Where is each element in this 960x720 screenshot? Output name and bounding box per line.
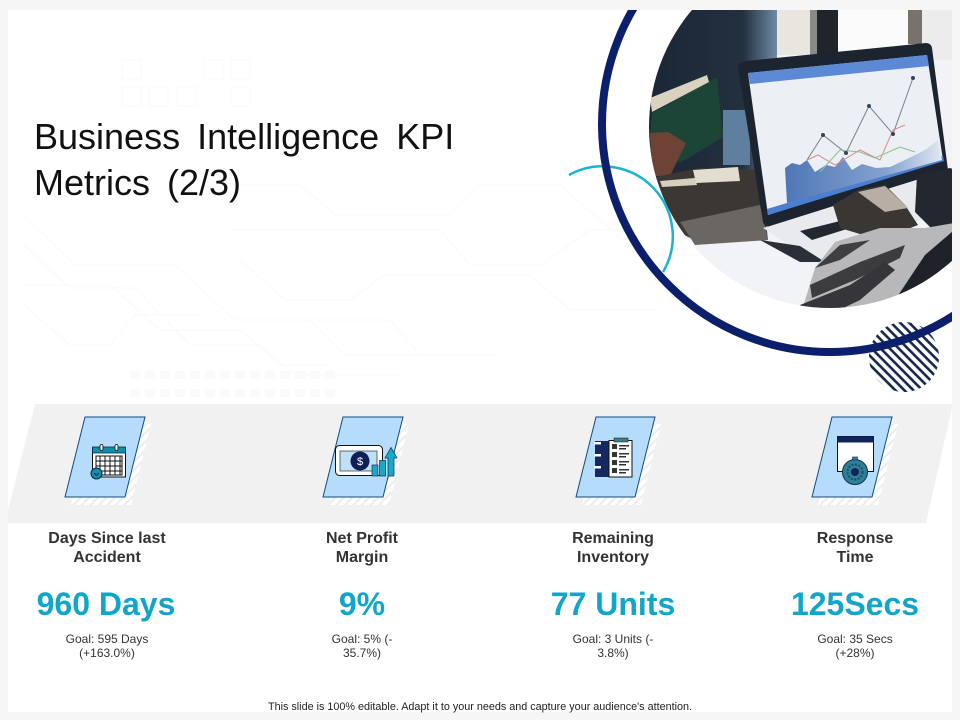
KPI 4: response time (791, 530, 919, 660)
KPI 3: remaining inventory: Remaining (572, 530, 654, 547)
KPI 1: days since last accident: (+163.0%) (79, 646, 135, 660)
KPI 4: response time: 125Secs (791, 586, 919, 622)
laptop screen (748, 55, 943, 215)
card 4: stopwatch window icon (812, 417, 898, 505)
grey band (8, 404, 952, 523)
card 3: inventory checklist icon (576, 417, 661, 505)
line chart (807, 78, 915, 172)
KPI 4: response time: (+28%) (835, 646, 875, 660)
title (34, 116, 454, 203)
KPI 3: remaining inventory (551, 530, 675, 660)
KPI 2: net profit margin (326, 530, 398, 660)
title: Metrics (2/3) (34, 162, 241, 203)
laptop base (763, 180, 922, 260)
KPI 3: remaining inventory: Goal: 3 Units (- (573, 632, 653, 646)
hands and sleeve (915, 168, 952, 228)
KPI 2: net profit margin: Goal: 5% (- (332, 632, 392, 646)
photo: laptop with chart (649, 10, 952, 308)
KPI 1: days since last accident: 960 Days (37, 586, 175, 622)
KPI 4: response time: Response (817, 530, 893, 547)
card 2: money and growth icon: $ (357, 456, 363, 468)
KPI 3: remaining inventory: 3.8%) (597, 646, 629, 660)
background circuit pattern (24, 60, 700, 393)
area chart (785, 140, 942, 203)
KPI 1: days since last accident: Accident (73, 549, 141, 566)
teal arc (569, 166, 673, 272)
KPI 2: net profit margin: 9% (339, 586, 385, 622)
KPI 4: response time: Time (836, 549, 874, 566)
KPI 2: net profit margin: 35.7%) (343, 646, 381, 660)
card 2: money and growth icon (323, 417, 409, 505)
footer note: This slide is 100% editable. Adapt it to your needs and capture your audience's attention. (268, 701, 692, 713)
KPI 1: days since last accident (37, 530, 175, 660)
KPI 1: days since last accident: Days Since last (48, 530, 166, 547)
card 1: calendar icon (65, 417, 151, 505)
laptop body (738, 43, 948, 226)
KPI 1: days since last accident: Goal: 595 Days (66, 632, 148, 646)
KPI 2: net profit margin: Net Profit (326, 530, 398, 547)
navy ring (602, 0, 960, 352)
title: Business Intelligence KPI (34, 116, 454, 157)
KPI 2: net profit margin: Margin (336, 549, 388, 566)
KPI 3: remaining inventory: Inventory (577, 549, 649, 566)
KPI 4: response time: Goal: 35 Secs (817, 632, 893, 646)
hatched circle (869, 322, 939, 392)
KPI 3: remaining inventory: 77 Units (551, 586, 675, 622)
